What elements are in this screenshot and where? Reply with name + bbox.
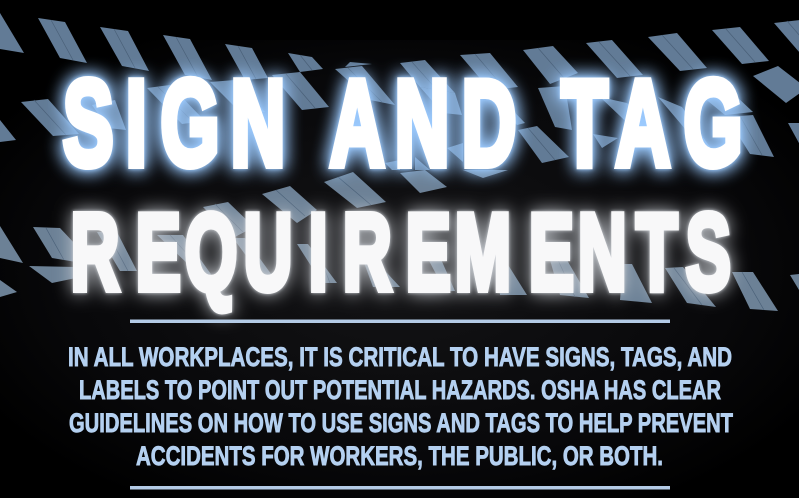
title line 2: REQUIREMENTS: REQUIREMENTS xyxy=(71,192,731,314)
caution tape strips, top xyxy=(0,13,799,170)
title line 1: SIGN AND TAG: SIGN AND TAG xyxy=(63,54,742,191)
intro paragraph xyxy=(68,342,733,471)
text: SIGN AND TAG xyxy=(63,54,742,191)
text: REQUIREMENTS xyxy=(71,192,731,314)
caution tape strips, bottom xyxy=(0,170,799,311)
